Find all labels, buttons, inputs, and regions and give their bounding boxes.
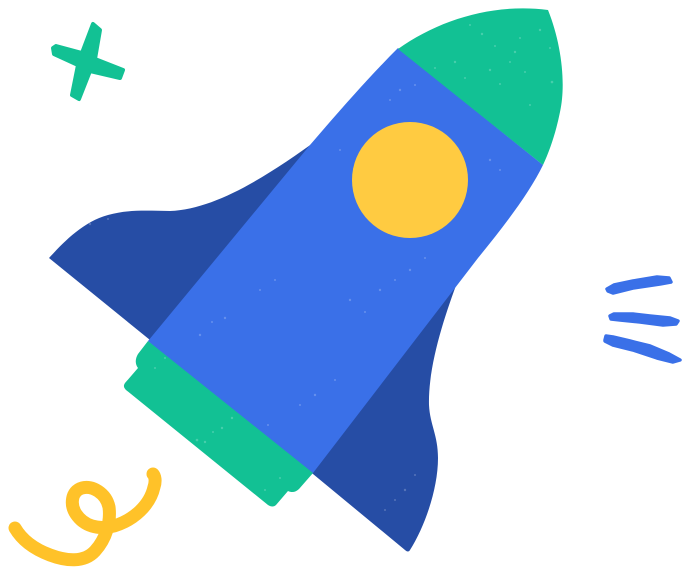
texture speckles [65, 24, 553, 511]
icon: blue speed lines [605, 277, 680, 362]
right wing [290, 280, 458, 552]
rocket body [148, 48, 543, 473]
icon: green cross doodle [53, 24, 123, 99]
icon: rocket [49, 8, 563, 551]
speed line bottom [605, 336, 680, 362]
speed line middle [610, 314, 678, 325]
engine base [124, 341, 313, 506]
porthole [352, 122, 468, 238]
nose cone [398, 8, 563, 165]
left wing [49, 138, 340, 340]
icon: yellow squiggle doodle [15, 474, 155, 560]
speed line top [607, 277, 671, 293]
